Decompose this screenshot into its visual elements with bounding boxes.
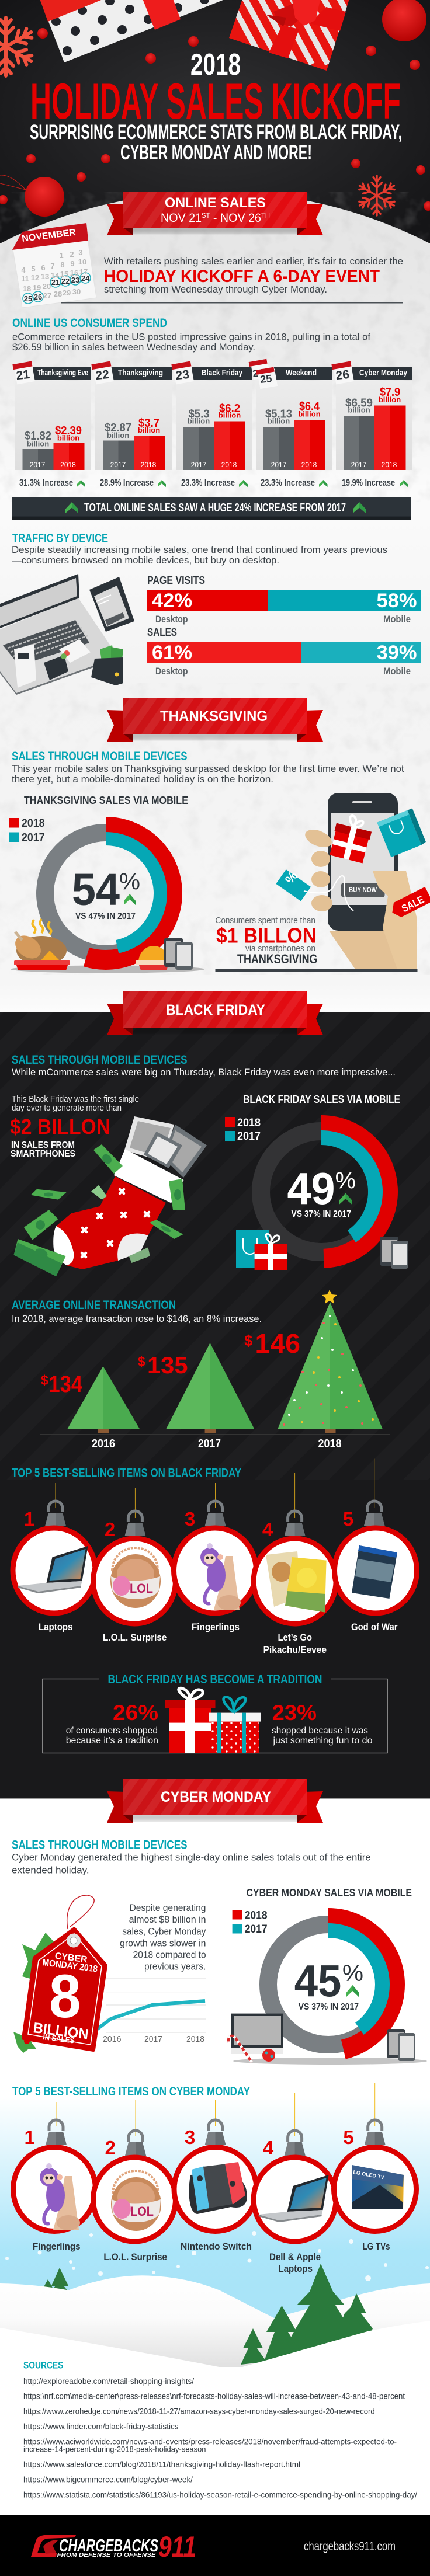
callout: $2 billion: $2 BILLON xyxy=(10,1115,110,1139)
icon: november calendar: 4 xyxy=(21,266,26,274)
panel: Thanksgiving: 2018 xyxy=(141,461,157,469)
heading: top 5 on black friday: TOP 5 BEST-SELLING ITEMS ON BLACK FRIDAY xyxy=(12,1467,241,1480)
icon: november calendar: 18 xyxy=(23,284,31,293)
text: source list: https://www.salesforce.com/blog/2018/11/thanksgiving-holiday-flash-report.html xyxy=(23,2460,300,2469)
text: source list: https://www.statista.com/statistics/861193/us-holiday-season-retail-e-commerce-spending-by-online-shopping-day/ xyxy=(23,2491,417,2500)
icon: november calendar: 3 xyxy=(78,248,83,257)
text: cyber monday growth note: almost $8 billion in xyxy=(129,1914,206,1925)
icon: gifts xyxy=(165,1688,261,1753)
text: cyber monday intro xyxy=(12,1852,371,1875)
text: source list: https://www.aciworldwide.com/news-and-events/press-releases/2018/november/fraud-attempts-expected-to- xyxy=(23,2437,397,2446)
icon: november calendar: 25 xyxy=(24,294,32,303)
ornament 5: god of war: God of War xyxy=(351,1621,398,1632)
icon: november calendar: 6 xyxy=(41,263,46,272)
chart: sales xyxy=(147,626,421,677)
panel: Thanksgiving Eve: billion xyxy=(27,439,49,448)
chart: page visits xyxy=(147,574,421,625)
panel: black friday tradition: because it’s a tradition xyxy=(66,1736,158,1746)
icon: november calendar: 9 xyxy=(70,259,75,268)
ornament 2: LOL surprise: 2 xyxy=(105,2137,116,2159)
legend: black friday xyxy=(225,1117,261,1143)
ornament 1: fingerlings xyxy=(13,2102,96,2252)
tree 2018: 146 xyxy=(255,1328,300,1359)
banner: black friday xyxy=(107,991,323,1035)
chart: page visits: PAGE VISITS xyxy=(147,574,205,586)
chart: christmas trees xyxy=(40,1290,390,1450)
icon: red ornament left xyxy=(0,175,64,217)
icon: sale tag xyxy=(389,887,430,920)
icon: november calendar: 26 xyxy=(34,293,42,301)
panel: Black Friday: 23 xyxy=(175,368,190,382)
text: holiday kickoff intro: stretching from Wednesday through Cyber Monday. xyxy=(104,284,327,295)
icon: roast turkey xyxy=(11,919,70,970)
subtitle: CYBER MONDAY AND MORE! xyxy=(120,141,312,164)
icon: november calendar: 22 xyxy=(61,277,70,286)
ornament 4: dell and apple laptops: Dell & Apple xyxy=(269,2251,321,2262)
banner: online sales: NOV 21 xyxy=(161,211,204,225)
panel: Black Friday: $6.2 xyxy=(219,402,240,415)
icon: november calendar: 17 xyxy=(79,267,88,276)
text: source list: increase-14-percent-during-2018-peak-holiday-season xyxy=(23,2445,206,2453)
icon: november calendar: 20 xyxy=(43,282,51,291)
text: average transaction intro: In 2018, average transaction rose to $146, an 8% increase. xyxy=(12,1313,262,1324)
text: cyber monday growth note: Despite generating xyxy=(130,1902,206,1913)
tree 2016 xyxy=(41,1366,140,1450)
icon: sales tag 8 billion: BILLION xyxy=(32,2020,89,2043)
callout: $1 billion: THANKSGIVING xyxy=(237,952,318,966)
banner: online sales: TH xyxy=(261,211,270,220)
chart: black friday donut xyxy=(255,1125,388,1259)
ornament 2: LOL surprise xyxy=(93,2100,175,2262)
panel: Weekend: 2018 xyxy=(301,461,317,469)
panel: Cyber Monday xyxy=(331,361,412,488)
ornament 1: laptops: Laptops xyxy=(39,1621,72,1632)
tree 2018 xyxy=(244,1290,383,1450)
text: source list: http://exploreadobe.com/retail-shopping-insights/ xyxy=(23,2377,194,2386)
panel: Thanksgiving: billion xyxy=(138,426,160,434)
icon: gift on phone xyxy=(328,812,374,864)
icon: november calendar: 1 xyxy=(59,251,64,260)
icon: snowflake left xyxy=(0,18,35,76)
panel: Cyber Monday: billion xyxy=(379,395,401,404)
panel: black friday tradition: just something fun to do xyxy=(272,1736,373,1746)
heading: black friday sales through mobile: SALES THROUGH MOBILE DEVICES xyxy=(12,1053,188,1067)
text: cyber monday intro: extended holiday. xyxy=(12,1865,89,1875)
tree 2016: 134 xyxy=(49,1371,83,1397)
icon: november calendar: NOVEMBER xyxy=(21,228,77,244)
icon: november calendar: 2 xyxy=(70,250,74,259)
text: traffic intro: —consumers browsed on mobile devices, but buy on desktop. xyxy=(12,555,279,566)
icon: monitor with candy cane xyxy=(228,2014,283,2062)
text: traffic intro: Despite steadily increasing mobile sales, one trend that continued from years previous xyxy=(12,544,387,555)
legend: cyber monday: 2017 xyxy=(245,1923,268,1936)
icon: november calendar: 13 xyxy=(41,272,49,281)
text: holiday kickoff intro xyxy=(104,256,403,295)
heading: cyber monday sales through mobile: SALES THROUGH MOBILE DEVICES xyxy=(12,1838,188,1852)
icon: november calendar: 28 xyxy=(54,290,62,298)
panel: Black Friday: Black Friday xyxy=(202,368,243,378)
panel: Weekend: 25 xyxy=(259,373,272,385)
icon: november calendar xyxy=(12,223,96,308)
ornament 5: LG TVs xyxy=(334,2083,416,2252)
icon: november calendar: 19 xyxy=(33,283,41,292)
icon: snowflake right xyxy=(357,176,397,215)
footer xyxy=(0,2515,430,2576)
ornament 4: let's go pikachu/eevee: Let’s Go xyxy=(278,1632,312,1643)
panel: Black Friday: 23.3% Increase xyxy=(181,477,235,488)
chart: sales: Desktop xyxy=(155,666,188,677)
panel: Thanksgiving: 22 xyxy=(95,368,110,382)
panel: Cyber Monday: billion xyxy=(348,405,370,415)
icon: bag and gift xyxy=(236,1230,287,1270)
banner: online sales: ST xyxy=(202,211,210,220)
ornament 3: nintendo switch: Nintendo Switch xyxy=(181,2241,252,2252)
text: source list xyxy=(23,2377,417,2500)
panel: Cyber Monday: $7.9 xyxy=(380,386,400,399)
icon: striped gift xyxy=(229,0,349,71)
hero background xyxy=(0,0,430,251)
callout: $2 billion: day ever to generate more than xyxy=(12,1103,122,1113)
ornament 1: fingerlings: Fingerlings xyxy=(33,2241,81,2252)
icon: november calendar: 7 xyxy=(50,262,55,270)
panel: Thanksgiving Eve: 31.3% Increase xyxy=(19,477,73,488)
panel: Thanksgiving: 2017 xyxy=(110,461,126,469)
callout: $2 billion: SMARTPHONES xyxy=(11,1149,75,1159)
banner: online sales: - NOV 26 xyxy=(210,211,261,225)
ornament 3: nintendo switch: 3 xyxy=(185,2126,195,2148)
ornament 5: god of war xyxy=(334,1459,417,1632)
ornament 5: LG TVs: LG OLED TV xyxy=(353,2169,385,2180)
panel: black friday tradition: BLACK FRIDAY HAS BECOME A TRADITION xyxy=(108,1673,322,1686)
text: thanksgiving intro: there yet, but a mobile-dominated holiday is on the horizon. xyxy=(12,774,273,785)
ornament 4: let's go pikachu/eevee xyxy=(254,1473,336,1655)
text: cyber monday growth note xyxy=(120,1902,206,1972)
panel: Thanksgiving Eve: 2018 xyxy=(60,461,76,469)
icon: november calendar: 27 xyxy=(43,291,51,300)
ornament 4: let's go pikachu/eevee: Pikachu/Eevee xyxy=(263,1644,327,1655)
callout: $1 billion: via smartphones on xyxy=(245,944,315,953)
icon: shopping bag xyxy=(377,808,426,857)
icon: red ornament top right xyxy=(382,0,426,41)
panel: Black Friday: 2017 xyxy=(191,461,207,469)
panel: black friday tradition: 23% xyxy=(272,1701,317,1725)
chart: page visits: 42% xyxy=(152,590,192,612)
logo: chargebacks 911: 911 xyxy=(158,2530,196,2563)
panel: Weekend: $5.13 xyxy=(265,408,292,420)
logo: chargebacks 911 xyxy=(31,2530,196,2563)
chart: cyber monday donut: % xyxy=(342,1961,363,1986)
banner: thanksgiving: THANKSGIVING xyxy=(160,708,268,725)
panel: black friday tradition: 26% xyxy=(113,1701,158,1725)
panel: Black Friday: billion xyxy=(219,411,241,419)
text: consumer spend intro xyxy=(12,332,370,353)
callout: $2 billion: IN SALES FROM xyxy=(11,1140,75,1150)
text: thanksgiving intro: This year mobile sales on Thanksgiving surpassed desktop for the first time ever. We’re not xyxy=(12,763,404,774)
subtitle xyxy=(30,121,402,164)
panel: Black Friday: 2018 xyxy=(221,461,237,469)
icon: november calendar: 15 xyxy=(60,270,68,279)
ornament 3: fingerlings: Fingerlings xyxy=(192,1621,240,1632)
chart: cyber monday growth line: 2016 xyxy=(103,2034,122,2044)
heading: thanksgiving sales through mobile: SALES THROUGH MOBILE DEVICES xyxy=(12,750,188,763)
icon: sales tag 8 billion xyxy=(13,1895,106,2053)
chart: black friday donut: % xyxy=(335,1168,356,1194)
tree 2018: 2018 xyxy=(318,1437,341,1450)
panel: Thanksgiving: $2.87 xyxy=(105,422,131,434)
chart: page visits: 58% xyxy=(376,590,417,612)
icon: november calendar: 16 xyxy=(70,269,78,277)
icon: november calendar: 10 xyxy=(78,257,86,266)
chart: thanksgiving donut xyxy=(39,827,172,960)
chart: thanksgiving donut: 54 xyxy=(72,865,120,915)
banner: online sales: ONLINE SALES xyxy=(165,195,266,211)
ornament 1: laptops xyxy=(13,1483,95,1632)
callout: $1 billion xyxy=(215,915,417,972)
text: source list: https:\nrf.com\media-center\press-releases\nrf-forecasts-holiday-sales-will-increase-between-43-and-48-percent xyxy=(23,2392,405,2401)
chart: page visits: Mobile xyxy=(383,614,411,625)
legend: black friday: 2017 xyxy=(237,1130,261,1143)
logo: chargebacks 911: FROM DEFENSE TO OFFENSE xyxy=(57,2551,157,2558)
callout: $1 billion: Consumers spent more than xyxy=(215,915,315,925)
panel: Thanksgiving: Thanksgiving xyxy=(118,368,163,378)
text: source list: https://www.bigcommerce.com/blog/cyber-week/ xyxy=(23,2476,193,2484)
chart: sales: Mobile xyxy=(383,666,411,677)
icon: november calendar: 24 xyxy=(81,274,90,283)
icon: november calendar: 21 xyxy=(51,278,60,287)
text: holiday kickoff intro: HOLIDAY KICKOFF A 6-DAY EVENT xyxy=(104,267,380,286)
panel: Thanksgiving Eve: $2.39 xyxy=(55,424,82,437)
legend: thanksgiving xyxy=(9,817,44,844)
icon: sale tag: SALE xyxy=(400,894,426,914)
callout: $1 billion: $1 BILLON xyxy=(216,924,317,947)
ornament 5: LG TVs: 5 xyxy=(343,2126,354,2148)
ornament 3: nintendo switch xyxy=(174,2100,256,2252)
heading: average online transaction: AVERAGE ONLINE TRANSACTION xyxy=(12,1299,176,1312)
panel: Cyber Monday: 26 xyxy=(335,368,350,382)
heading: traffic by device: TRAFFIC BY DEVICE xyxy=(12,531,108,545)
icon: phones xyxy=(164,938,193,970)
panel: Thanksgiving Eve xyxy=(12,361,91,488)
legend: cyber monday xyxy=(233,1909,268,1936)
panel: Weekend: 24 xyxy=(252,367,265,380)
panel: Weekend: Weekend xyxy=(286,368,317,378)
text: source list: https://www.zerohedge.com/news/2018-11-27/amazon-says-cyber-monday-sales-surged-20-new-record xyxy=(23,2407,375,2416)
tree 2017: 135 xyxy=(147,1353,188,1378)
panel: Thanksgiving Eve: 2017 xyxy=(30,461,46,469)
decorative red berries xyxy=(0,28,430,211)
panel: Black Friday xyxy=(171,361,252,488)
snowy background panel xyxy=(0,192,430,1016)
banner: cyber monday: CYBER MONDAY xyxy=(161,1789,271,1805)
panel: black friday tradition: shopped because it was xyxy=(272,1726,368,1736)
chart: cyber monday growth line: 2018 xyxy=(186,2034,204,2044)
panel: Thanksgiving: 28.9% Increase xyxy=(100,477,154,488)
sky background xyxy=(0,2097,430,2356)
text: black friday intro: While mCommerce sales were big on Thursday, Black Friday was even more impressive... xyxy=(12,1067,396,1078)
panel: Weekend: 2017 xyxy=(271,461,287,469)
text: consumer spend intro: eCommerce retailers in the US posted impressive gains in 2018, pulling in a total of xyxy=(12,332,370,342)
icon: phones xyxy=(387,2029,415,2061)
title: 2018: 2018 xyxy=(190,48,241,82)
panel: Thanksgiving xyxy=(91,361,172,488)
icon: sales tag 8 billion: 8 xyxy=(49,1962,81,2031)
banner: thanksgiving xyxy=(107,698,323,742)
icon: sales tag 8 billion: CYBER xyxy=(54,1951,88,1965)
panel: Cyber Monday: Cyber Monday xyxy=(359,368,408,378)
icon: november calendar: 29 xyxy=(63,288,71,297)
icon: sales tag 8 billion: IN SALES xyxy=(43,2032,75,2045)
ornament 3: fingerlings: 3 xyxy=(185,1508,195,1530)
chart: cyber monday donut: 45 xyxy=(294,1957,341,2007)
snowy hills with pine trees xyxy=(0,2264,430,2516)
icon: november calendar: 5 xyxy=(31,264,36,273)
ornament 2: LOL surprise: L.O.L. Surprise xyxy=(103,1632,167,1643)
icon: ground shadow xyxy=(11,966,204,973)
panel: Weekend: $6.4 xyxy=(299,401,320,413)
icon: november calendar: 23 xyxy=(71,276,79,284)
icon: ground shadow xyxy=(233,2058,427,2065)
text: cyber monday growth note: growth was slower in xyxy=(120,1937,206,1949)
panel: Thanksgiving Eve: $1.82 xyxy=(25,430,51,443)
legend: black friday: 2018 xyxy=(237,1117,261,1129)
ornament 4: dell and apple laptops: 4 xyxy=(263,2137,274,2159)
tree 2017: $ xyxy=(138,1354,145,1369)
text: cyber monday growth note: 2018 compared to xyxy=(133,1949,206,1961)
panel: Cyber Monday: 2018 xyxy=(382,461,397,469)
icon: sales tag 8 billion: MONDAY 2018 xyxy=(42,1958,98,1975)
chart: sales: SALES xyxy=(147,626,177,638)
chart: cyber monday growth line: 2017 xyxy=(144,2034,162,2044)
heading: black friday donut: BLACK FRIDAY SALES VIA MOBILE xyxy=(243,1093,400,1105)
chart: black friday donut: 49 xyxy=(287,1164,335,1214)
icon: percent tag xyxy=(276,868,312,901)
illustration: stocking with phones and money xyxy=(14,1116,207,1276)
panel: Weekend xyxy=(249,359,332,488)
panel: Black Friday: $5.3 xyxy=(188,408,209,420)
heading: top 5 on cyber monday: TOP 5 BEST-SELLING ITEMS ON CYBER MONDAY xyxy=(12,2085,250,2098)
chart: cyber monday growth line xyxy=(93,1978,206,2044)
ornament 4: dell and apple laptops xyxy=(254,2093,336,2274)
heading: online US consumer spend: ONLINE US CONSUMER SPEND xyxy=(12,316,167,330)
tree 2017: 2017 xyxy=(198,1437,221,1450)
illustration: hand holding phone xyxy=(276,793,430,969)
tree 2018: $ xyxy=(244,1332,253,1349)
banner: cyber monday xyxy=(107,1779,323,1823)
text: source list: https://www.finder.com/black-friday-statistics xyxy=(23,2422,179,2431)
legend: cyber monday: 2018 xyxy=(245,1909,268,1922)
text: traffic intro xyxy=(12,544,387,566)
ornament 2: LOL surprise xyxy=(93,1488,175,1643)
banner: black friday: BLACK FRIDAY xyxy=(166,1002,265,1018)
ornament 5: LG TVs: LG TVs xyxy=(362,2241,390,2252)
text: website: chargebacks911.com xyxy=(304,2540,396,2553)
legend: thanksgiving: 2017 xyxy=(22,831,44,844)
text: holiday kickoff intro: With retailers pushing sales earlier and earlier, it’s fair to consider the xyxy=(104,256,403,267)
icon: pie xyxy=(136,946,172,970)
panel: Thanksgiving: billion xyxy=(107,431,129,440)
icon: november calendar: 14 xyxy=(51,271,60,280)
ornament 5: god of war: 5 xyxy=(343,1508,353,1530)
tree 2016: $ xyxy=(41,1373,48,1388)
icon: polka dot gift xyxy=(40,0,226,62)
tree 2016: 2016 xyxy=(92,1437,115,1450)
panel: Thanksgiving Eve: billion xyxy=(57,433,79,443)
heading: sources: SOURCES xyxy=(23,2360,63,2370)
icon: november calendar: 8 xyxy=(60,260,65,269)
panel: Cyber Monday: 19.9% Increase xyxy=(342,477,395,488)
text: consumer spend intro: $26.59 billion in sales between Wednesday and Monday. xyxy=(12,342,255,353)
ornament 4: dell and apple laptops: Laptops xyxy=(278,2263,313,2274)
icon: november calendar: 12 xyxy=(31,273,39,282)
tree 2017 xyxy=(138,1343,255,1450)
callout: total online sales xyxy=(12,497,411,520)
banner: online sales xyxy=(107,192,323,235)
panel: black friday tradition: of consumers shopped xyxy=(66,1726,158,1736)
panel: Thanksgiving: $3.7 xyxy=(138,417,159,430)
chart: page visits: Desktop xyxy=(155,614,188,625)
panel: Weekend: billion xyxy=(298,410,321,418)
panel: Cyber Monday: 2017 xyxy=(351,461,367,469)
black friday background xyxy=(0,1012,430,2091)
chart: black friday donut: VS 37% IN 2017 xyxy=(291,1209,351,1219)
panel: Thanksgiving Eve: 21 xyxy=(16,368,30,382)
ornament 4: let's go pikachu/eevee: 4 xyxy=(262,1519,273,1540)
panel: Black Friday: billion xyxy=(188,417,210,425)
panel: Cyber Monday: $6.59 xyxy=(345,397,373,410)
ornament 1: fingerlings: 1 xyxy=(25,2126,35,2148)
logo: chargebacks 911: CHARGEBACKS xyxy=(59,2535,158,2556)
heading: thanksgiving donut: THANKSGIVING SALES VIA MOBILE xyxy=(24,794,188,806)
chart: sales: 61% xyxy=(152,642,192,664)
panel: black friday tradition xyxy=(43,1673,387,1753)
chart: cyber monday donut xyxy=(262,1918,395,2051)
icon: november calendar: 30 xyxy=(72,287,81,296)
panel: Weekend: 23.3% Increase xyxy=(261,477,315,488)
chart: thanksgiving donut: % xyxy=(119,869,140,894)
text: thanksgiving intro xyxy=(12,763,404,785)
icon: percent tag: % xyxy=(282,869,300,886)
illustration: hand holding phone: BUY NOW xyxy=(349,886,377,894)
callout: $2 billion: This Black Friday was the first single xyxy=(12,1094,139,1104)
chart: thanksgiving donut: VS 47% IN 2017 xyxy=(75,911,136,921)
icon: phones xyxy=(380,1237,408,1269)
ornament 1: laptops: 1 xyxy=(24,1508,34,1530)
illustration: laptop, phone and wallet xyxy=(0,574,134,695)
text: cyber monday growth note: previous years. xyxy=(144,1961,206,1972)
ornament 3: fingerlings xyxy=(174,1483,256,1632)
callout: $2 billion xyxy=(10,1094,139,1159)
icon: november calendar: 11 xyxy=(21,274,29,283)
text: cyber monday growth note: sales, Cyber Monday xyxy=(122,1926,206,1937)
panel: Weekend: billion xyxy=(268,417,290,425)
ornament 2: LOL surprise: L.O.L. Surprise xyxy=(103,2251,167,2262)
chart: sales: 39% xyxy=(376,642,417,664)
ornament 2: LOL surprise: 2 xyxy=(105,1519,115,1540)
panel: Thanksgiving Eve: Thanksgiving Eve xyxy=(37,368,88,378)
text: cyber monday intro: Cyber Monday generated the highest single-day online sales totals out of the entire xyxy=(12,1852,371,1863)
chart: cyber monday donut: VS 37% IN 2017 xyxy=(299,2002,359,2012)
legend: thanksgiving: 2018 xyxy=(22,817,44,830)
